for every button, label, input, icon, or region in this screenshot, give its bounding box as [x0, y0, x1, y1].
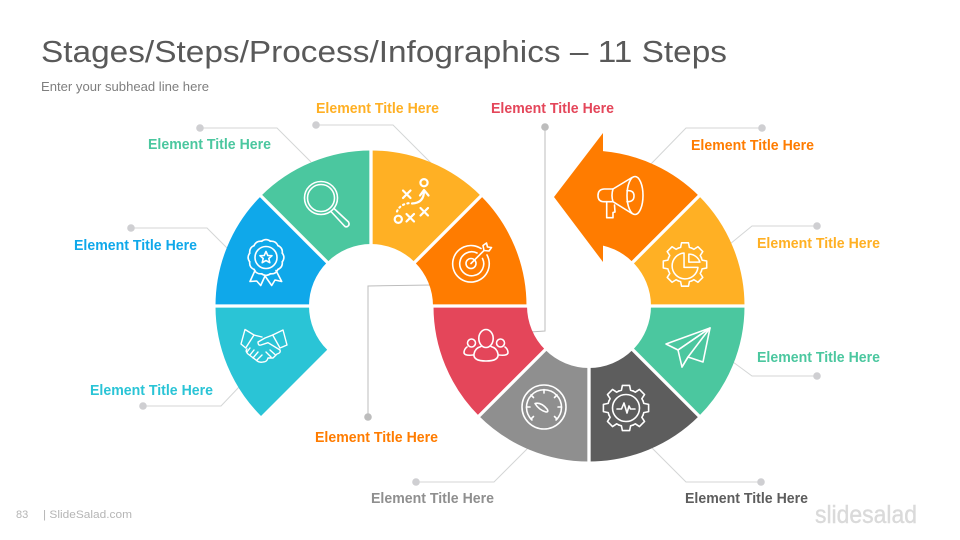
step: gauge segment [479, 350, 589, 462]
logo wordmark: slidesalad [815, 501, 917, 529]
label: search step: Element Title Here [148, 136, 271, 153]
icon: people [464, 330, 508, 361]
leader lines and dots [127, 121, 821, 486]
step: paper plane segment [633, 306, 745, 416]
icon: gear with pie [663, 243, 707, 286]
step: award segment [215, 196, 327, 306]
icon: target [453, 243, 492, 282]
step: search segment [261, 150, 371, 262]
label: team step: Element Title Here [491, 100, 614, 117]
icon: play diagram [395, 179, 428, 223]
page number: 83 [16, 509, 28, 521]
icon: speed gauge [522, 385, 566, 429]
icon: handshake [241, 330, 287, 362]
label: strategy step: Element Title Here [316, 100, 439, 117]
step: strategy segment [371, 150, 481, 262]
label: gear chart step: Element Title Here [757, 235, 880, 252]
title: Stages/Steps/Process/Infographics – 11 Steps [41, 34, 727, 69]
icon: megaphone [598, 176, 643, 218]
dividers [212, 147, 748, 465]
icon: gear with pulse [603, 385, 649, 431]
step: megaphone arrow segment [554, 133, 699, 262]
label: megaphone step: Element Title Here [691, 137, 814, 154]
icon: magnifier [304, 182, 349, 227]
label: award step: Element Title Here [74, 237, 197, 254]
icon: award ribbon [248, 240, 284, 286]
step: target segment [415, 196, 526, 306]
footer source: | SlideSalad.com [43, 509, 132, 521]
step: gear pulse segment [589, 350, 699, 462]
subhead: Enter your subhead line here [41, 80, 209, 94]
label: gear pulse step: Element Title Here [685, 490, 808, 507]
icon: paper plane [666, 328, 710, 367]
step: team segment [433, 306, 545, 416]
label: handshake step: Element Title Here [90, 382, 213, 399]
label: paper plane step: Element Title Here [757, 349, 880, 366]
label: target step: Element Title Here [315, 429, 438, 446]
step: gear chart segment [633, 196, 744, 306]
step: handshake segment [215, 306, 327, 416]
label: gauge step: Element Title Here [371, 490, 494, 507]
